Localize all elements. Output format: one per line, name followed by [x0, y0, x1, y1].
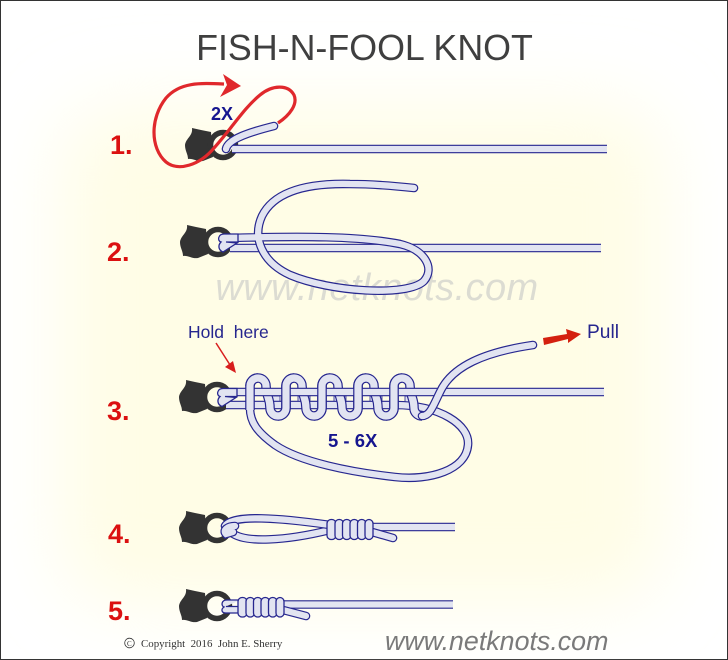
step 2	[107, 184, 601, 291]
step number 1: 1.	[110, 130, 133, 160]
red wrap arrow	[154, 74, 295, 167]
eye of hook, step 2	[180, 225, 230, 258]
hook turn, step 3	[218, 388, 237, 406]
label Pull: Pull	[587, 322, 619, 343]
standing line, step 4	[372, 523, 455, 531]
tag end, step 1	[226, 126, 274, 149]
standing line, step 1	[232, 145, 607, 153]
loop, step 2	[230, 184, 428, 291]
inner tick pieces	[265, 396, 415, 402]
tag end, step 5	[283, 610, 306, 616]
step number 4: 4.	[108, 519, 131, 549]
hook turn, step 4	[225, 526, 235, 534]
upper standing line, step 3	[229, 388, 604, 396]
step number 5: 5.	[108, 596, 131, 626]
pulled tag end	[422, 345, 533, 416]
label 2X: 2X	[211, 104, 233, 124]
watermark: www.netknots.com	[215, 267, 539, 309]
title: FISH-N-FOOL KNOT	[196, 28, 533, 68]
step number 2: 2.	[107, 237, 130, 267]
step 1	[110, 74, 607, 167]
step 3	[107, 322, 619, 478]
website footer: www.netknots.com	[385, 626, 608, 656]
coils	[250, 378, 422, 416]
copyright: C	[127, 640, 132, 648]
step 4	[108, 511, 455, 549]
eye of hook, step 5	[179, 589, 230, 622]
tag end, step 4	[372, 532, 393, 538]
pull arrow	[543, 329, 581, 345]
copyright: Copyright 2016 John E. Sherry	[141, 638, 283, 650]
hook turn, step 5	[222, 600, 240, 613]
standing line, step 2	[230, 244, 601, 252]
label 5 - 6X: 5 - 6X	[328, 430, 378, 451]
ascending coil limbs	[250, 378, 402, 416]
label Hold here: Hold here	[188, 322, 269, 342]
eye of hook, step 3	[179, 380, 230, 413]
hold arrow	[216, 343, 236, 373]
wraps, step 5	[238, 598, 284, 617]
step 5	[108, 589, 453, 626]
lower strand, step 4	[232, 530, 330, 539]
hook turn, step 2	[219, 234, 238, 252]
eye of hook, step 1	[185, 128, 236, 161]
eye of hook, step 4	[179, 511, 230, 544]
upper strand, step 4	[225, 518, 330, 526]
wraps, step 4	[327, 520, 373, 540]
standing line, step 5	[282, 600, 453, 609]
step number 3: 3.	[107, 396, 130, 426]
lower line and big loop	[226, 405, 468, 478]
